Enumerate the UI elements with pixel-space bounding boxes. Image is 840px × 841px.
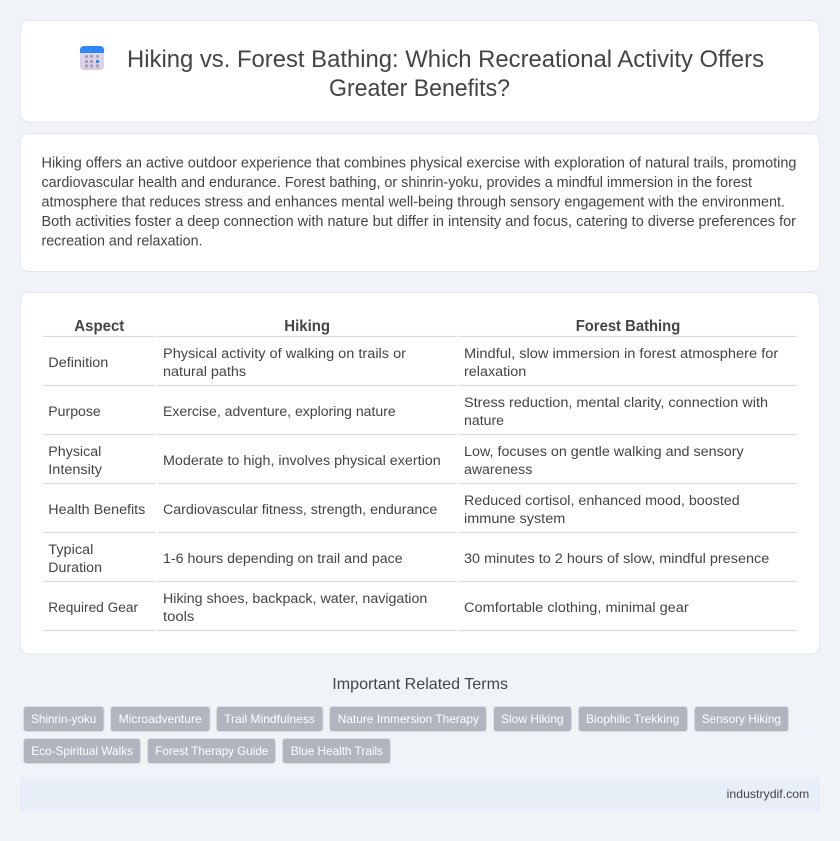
row: Definition: Mindful, slow immersion in forest atmosphere for bbox=[464, 346, 779, 362]
text block: introduction paragraph: recreation and relaxation. bbox=[42, 234, 202, 250]
row: Health Benefits: Health Benefits bbox=[48, 502, 145, 518]
row: Physical Intensity: Moderate to high, involves physical exertion bbox=[163, 453, 441, 469]
row: Typical Duration: Typical bbox=[48, 542, 93, 558]
text block: introduction paragraph bbox=[42, 156, 796, 250]
tag: Forest Therapy Guide bbox=[148, 738, 276, 764]
footer bbox=[20, 777, 820, 811]
row: Required Gear: Hiking shoes, backpack, water, navigation bbox=[163, 591, 427, 607]
row: Purpose: Purpose bbox=[48, 404, 101, 420]
title bbox=[127, 46, 764, 102]
tag: Trail Mindfulness bbox=[216, 706, 323, 732]
row: Definition: natural paths bbox=[163, 364, 246, 380]
row: Definition: relaxation bbox=[464, 364, 526, 380]
row: Required Gear bbox=[48, 591, 689, 625]
row: Health Benefits bbox=[48, 493, 740, 527]
tag: Forest Therapy Guide: Forest Therapy Guide bbox=[155, 744, 269, 758]
tag: Blue Health Trails: Blue Health Trails bbox=[291, 744, 383, 758]
text block: introduction paragraph: cardiovascular health and endurance. Forest bathing, or shinrin-yoku, provides a mindful immersion in the forest bbox=[42, 175, 752, 191]
row: Typical Duration: 1-6 hours depending on trail and pace bbox=[163, 551, 403, 567]
tag: Slow Hiking bbox=[494, 706, 572, 732]
tags: related terms bbox=[24, 706, 788, 764]
tag: Slow Hiking: Slow Hiking bbox=[501, 712, 564, 726]
panel: introduction bbox=[20, 134, 820, 272]
icon: calendar bbox=[80, 46, 104, 70]
title: Hiking vs. Forest Bathing: Which Recreational Activity Offers bbox=[127, 46, 764, 73]
tag: Shinrin-yoku bbox=[24, 706, 104, 732]
tag: Sensory Hiking: Sensory Hiking bbox=[702, 712, 781, 726]
row: Physical Intensity: awareness bbox=[464, 462, 532, 478]
row: Physical Intensity: Physical bbox=[48, 444, 101, 460]
row: Definition: Physical activity of walking on trails or bbox=[163, 346, 406, 362]
row: Purpose: Stress reduction, mental clarity, connection with bbox=[464, 395, 768, 411]
row: Purpose: Exercise, adventure, exploring nature bbox=[163, 404, 396, 420]
tag: Shinrin-yoku: Shinrin-yoku bbox=[31, 712, 96, 726]
tag: Sensory Hiking bbox=[694, 706, 788, 732]
row: Definition: Definition bbox=[48, 355, 108, 371]
row: Typical Duration: Duration bbox=[48, 560, 102, 576]
row: Physical Intensity: Low, focuses on gentle walking and sensory bbox=[464, 444, 745, 460]
row: Health Benefits: Cardiovascular fitness, strength, endurance bbox=[163, 502, 437, 518]
panel: comparison table bbox=[20, 292, 820, 654]
table header: Forest Bathing bbox=[576, 318, 680, 335]
footer: industrydif.com bbox=[727, 787, 809, 801]
row: Health Benefits: immune system bbox=[464, 511, 565, 527]
row: Health Benefits: Reduced cortisol, enhanced mood, boosted bbox=[464, 493, 740, 509]
row: Required Gear: Required Gear bbox=[48, 600, 138, 616]
row: Physical Intensity bbox=[48, 444, 745, 478]
tag: Eco-Spiritual Walks bbox=[24, 738, 140, 764]
tag: Nature Immersion Therapy bbox=[330, 706, 486, 732]
tag: Biophilic Trekking: Biophilic Trekking bbox=[586, 712, 679, 726]
tag: Nature Immersion Therapy: Nature Immersion Therapy bbox=[338, 712, 479, 726]
text block: introduction paragraph: atmosphere that reduces stress and enhances mental well-being through sensory engagement with the environment. bbox=[42, 194, 785, 210]
table header: Aspect bbox=[74, 318, 125, 335]
tag: Microadventure: Microadventure bbox=[119, 712, 202, 726]
text block: introduction paragraph: Both activities foster a deep connection with nature but differ in intensity and focus, catering to diverse preferences for bbox=[42, 214, 796, 230]
panel: header bbox=[20, 20, 820, 122]
row: Required Gear: Comfortable clothing, minimal gear bbox=[464, 600, 689, 616]
row: Physical Intensity: Intensity bbox=[48, 462, 103, 478]
text block: introduction paragraph: Hiking offers an active outdoor experience that combines physical exercise with exploration of natural trails, promoting bbox=[42, 156, 796, 172]
row: Typical Duration: 30 minutes to 2 hours of slow, mindful presence bbox=[464, 551, 769, 567]
table header bbox=[74, 318, 680, 335]
tag: Trail Mindfulness: Trail Mindfulness bbox=[224, 712, 315, 726]
row: Purpose: nature bbox=[464, 413, 504, 429]
tag: Eco-Spiritual Walks: Eco-Spiritual Walks bbox=[31, 744, 133, 758]
row: Required Gear: tools bbox=[163, 609, 194, 625]
tag: Microadventure bbox=[110, 706, 210, 732]
tag: Biophilic Trekking bbox=[578, 706, 688, 732]
table header: Hiking bbox=[284, 318, 330, 335]
title: Greater Benefits? bbox=[329, 75, 510, 102]
tag: Blue Health Trails bbox=[282, 738, 390, 764]
row: Definition bbox=[48, 346, 779, 380]
heading: related terms: Important Related Terms bbox=[332, 676, 508, 693]
row: Typical Duration bbox=[48, 542, 769, 576]
row: Purpose bbox=[48, 395, 768, 429]
